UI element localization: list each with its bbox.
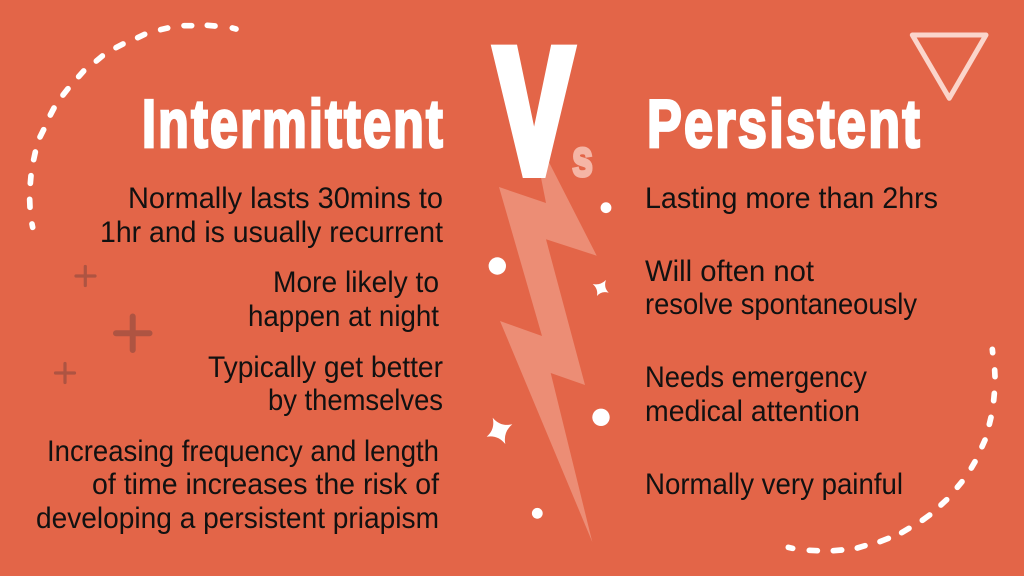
text: resolution: by themselves: [268, 384, 443, 417]
text: duration: 1hr and is usually recurrent: [100, 216, 444, 249]
text: resolution: [208, 351, 443, 417]
icons: plus signs: [56, 266, 150, 382]
icon: lightning bolt: [499, 127, 597, 542]
text: timing: [248, 266, 440, 333]
heading: intermittent: Intermittent: [142, 86, 445, 162]
vs mark: [496, 14, 593, 210]
text: pain: Normally very painful: [645, 468, 903, 501]
dashed arc bottom right: [788, 349, 995, 551]
panel: intermittent: [36, 86, 445, 535]
text: resolution: Typically get better: [208, 351, 443, 384]
text: emergency: medical attention: [645, 395, 860, 428]
small s: s: [572, 130, 593, 188]
text: risk: of time increases the risk of: [92, 468, 440, 501]
text: emergency: Needs emergency: [645, 361, 867, 394]
big V: V: [496, 14, 572, 210]
text: risk: developing a persistent priapism: [36, 502, 439, 535]
icons: dots: [489, 202, 611, 519]
text: resolution: resolve spontaneously: [645, 288, 917, 321]
icon: triangle outline: [912, 35, 986, 98]
text: emergency: [645, 361, 867, 428]
text: timing: happen at night: [248, 300, 440, 333]
text: resolution: Will often not: [645, 255, 815, 288]
text: risk: Increasing frequency and length: [47, 435, 439, 468]
text: duration: Normally lasts 30mins to: [128, 182, 443, 215]
text: timing: More likely to: [273, 266, 439, 299]
text: duration: [100, 182, 444, 249]
panel: persistent: [645, 86, 938, 501]
text: resolution: [645, 255, 917, 321]
text: duration: Lasting more than 2hrs: [645, 182, 938, 215]
text: risk: [36, 435, 440, 535]
heading: persistent: Persistent: [647, 86, 922, 162]
icons: sparkles: [487, 280, 609, 444]
dashed arc top left: [30, 25, 236, 227]
